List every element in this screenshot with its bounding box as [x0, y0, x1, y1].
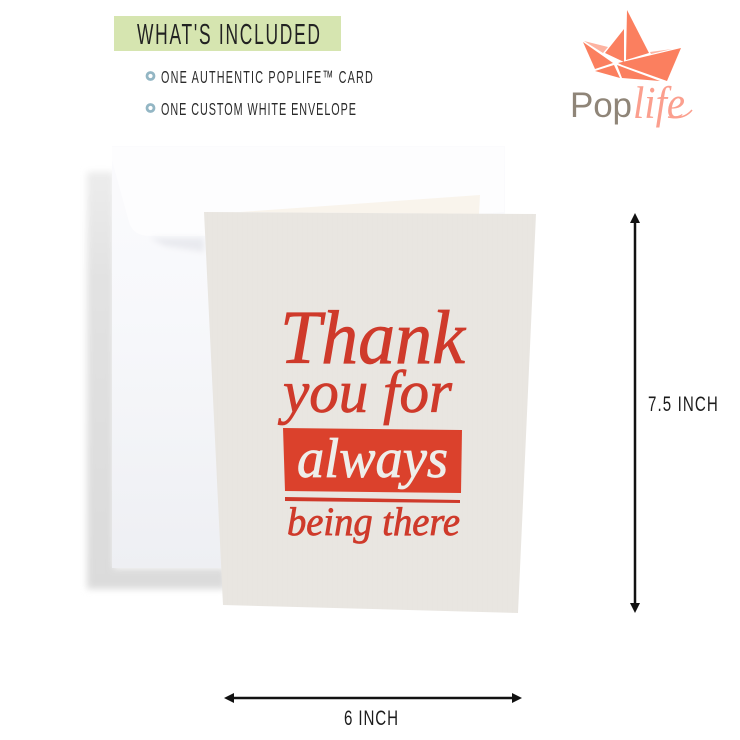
red rule	[285, 497, 460, 503]
label: 6 inch: 6 INCH	[344, 705, 398, 730]
envelope body	[112, 146, 505, 568]
card: back panel	[240, 195, 480, 214]
envelope	[87, 146, 505, 589]
red banner: always: always	[297, 428, 448, 490]
envelope shadow	[87, 172, 226, 589]
wordmark: life: life	[633, 78, 685, 128]
arrow: width dimension	[224, 693, 522, 703]
label: 7.5 inch: 7.5 INCH	[648, 391, 718, 416]
list: included items	[147, 68, 373, 120]
list item: card: ONE AUTHENTIC POPLIFE™ CARD	[161, 68, 373, 88]
arrow: height dimension	[630, 213, 640, 613]
card text: you for: you for	[277, 359, 453, 425]
envelope flap	[112, 147, 504, 236]
card: front	[204, 212, 536, 613]
logo: poplife paper boat	[570, 10, 692, 128]
icon: paper boat	[583, 10, 681, 81]
list item: envelope: ONE CUSTOM WHITE ENVELOPE	[161, 100, 356, 120]
wordmark swash	[668, 110, 692, 118]
card text: being there: being there	[287, 499, 460, 544]
wordmark: Pop: Pop	[570, 86, 632, 125]
flap shadow	[150, 238, 204, 252]
heading: what's included: WHAT'S INCLUDED	[137, 19, 320, 51]
card text: Thank: Thank	[280, 296, 466, 380]
